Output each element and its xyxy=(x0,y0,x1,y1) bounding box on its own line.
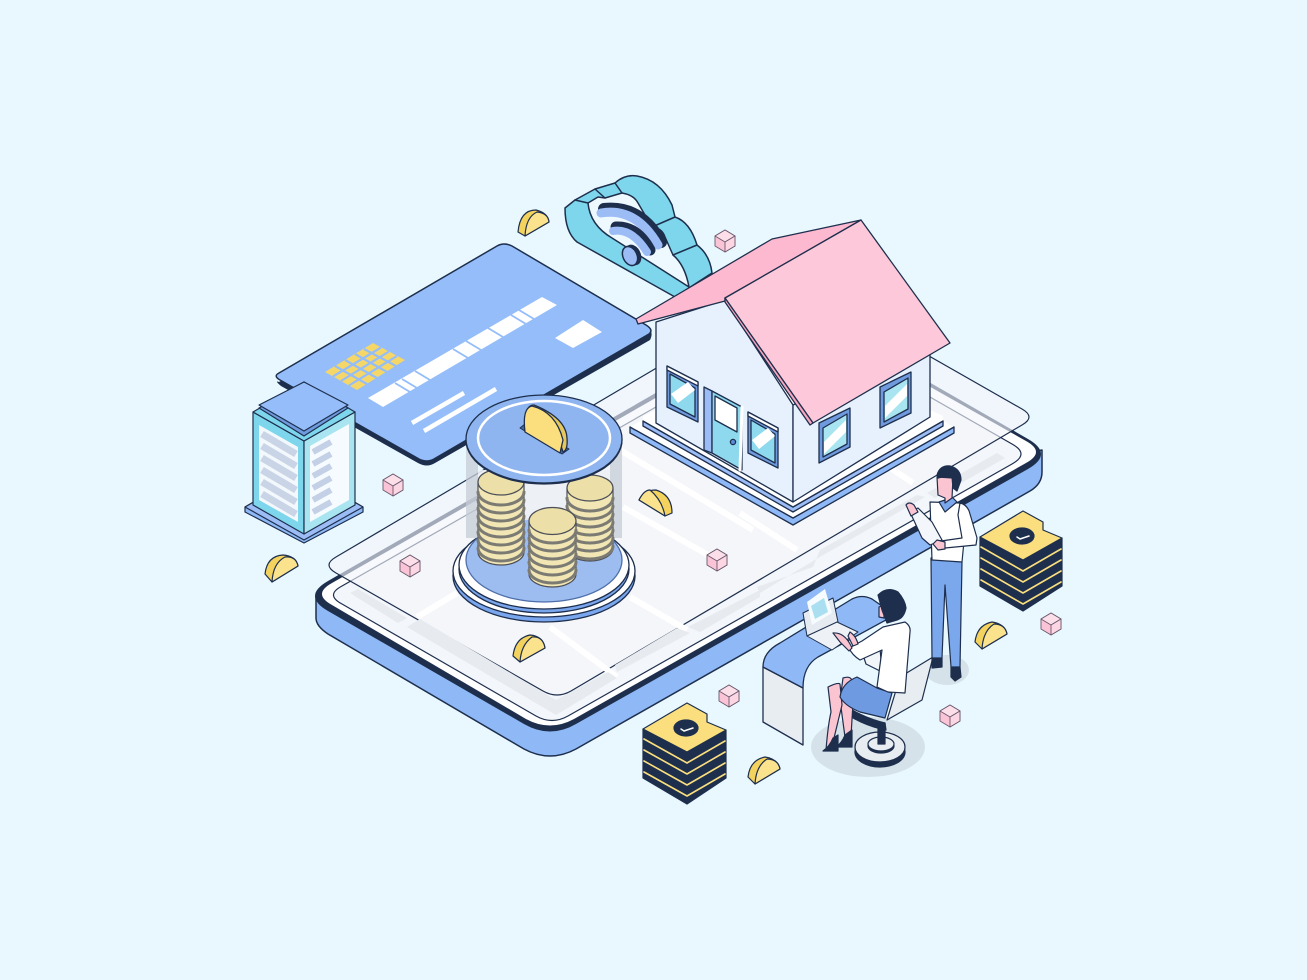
woman skirt xyxy=(840,677,892,718)
laptop xyxy=(803,589,858,650)
house plinth xyxy=(630,427,954,525)
server right face xyxy=(304,412,355,534)
house right roof xyxy=(725,220,950,423)
coin stack right xyxy=(567,475,613,561)
screen grey blocks xyxy=(350,453,1005,715)
half coin 3 xyxy=(639,490,672,516)
half coin 6 xyxy=(748,757,780,784)
card text lines xyxy=(412,389,496,431)
house left roof xyxy=(636,220,861,324)
phone platform xyxy=(315,316,1042,756)
seated woman xyxy=(823,590,933,767)
laptop document xyxy=(807,589,832,625)
jar base xyxy=(453,530,635,622)
server base xyxy=(245,473,363,543)
chair xyxy=(838,657,933,767)
cube 3 xyxy=(400,555,420,577)
file stack right xyxy=(980,511,1062,611)
woman back leg xyxy=(840,677,853,737)
house left wall xyxy=(656,300,793,502)
man right arm xyxy=(941,503,977,548)
screen pattern xyxy=(350,450,1005,715)
woman front leg xyxy=(826,683,842,750)
shadow under man xyxy=(925,655,969,685)
man left arm with paper xyxy=(910,508,942,545)
woman torso and arm xyxy=(849,622,910,693)
server tower xyxy=(245,382,363,543)
desk xyxy=(763,596,895,745)
server cap xyxy=(253,382,355,441)
coin jar xyxy=(453,395,635,622)
clock badge xyxy=(1010,528,1034,544)
window 2 xyxy=(748,412,778,468)
card number strip xyxy=(368,297,557,407)
man head xyxy=(937,466,961,503)
jar glass wall xyxy=(466,440,622,538)
shadow under chair xyxy=(811,717,925,777)
server left face xyxy=(253,412,304,534)
man hands xyxy=(906,503,945,550)
jar lid xyxy=(466,396,622,484)
window 1 xyxy=(667,366,698,422)
card chip xyxy=(325,343,405,390)
window 4 xyxy=(880,372,911,428)
credit card xyxy=(276,244,652,466)
house xyxy=(630,220,954,525)
coin stack front xyxy=(529,508,576,587)
cube 2 xyxy=(383,474,403,496)
half coin 4 xyxy=(513,635,545,662)
coin slot xyxy=(520,424,569,454)
file stack left xyxy=(643,703,726,804)
wifi arcs xyxy=(601,209,661,252)
man collar xyxy=(939,497,957,512)
cube 4 xyxy=(707,549,727,571)
woman hand xyxy=(833,632,858,651)
man shoes xyxy=(932,658,942,668)
half coin 5 xyxy=(975,622,1007,649)
half coin 1 xyxy=(518,210,549,236)
clock badge xyxy=(674,720,698,736)
door xyxy=(704,387,742,470)
man torso xyxy=(930,502,966,562)
glass layer xyxy=(329,287,1029,695)
cube 7 xyxy=(1041,613,1061,635)
falling coin xyxy=(524,405,567,453)
card security box xyxy=(555,320,602,348)
cloud wifi icon xyxy=(565,176,712,297)
cube 5 xyxy=(719,685,739,707)
standing man xyxy=(906,466,977,681)
window 3 xyxy=(819,408,850,463)
screen stripes xyxy=(417,450,913,677)
house right wall xyxy=(793,340,930,502)
man trousers xyxy=(931,558,962,667)
half coin 2 xyxy=(265,555,298,582)
cube 6 xyxy=(940,705,960,727)
coin stack left xyxy=(478,469,524,565)
cube 1 xyxy=(715,230,735,252)
paper stack under desk xyxy=(863,648,882,672)
woman hair xyxy=(878,590,906,623)
